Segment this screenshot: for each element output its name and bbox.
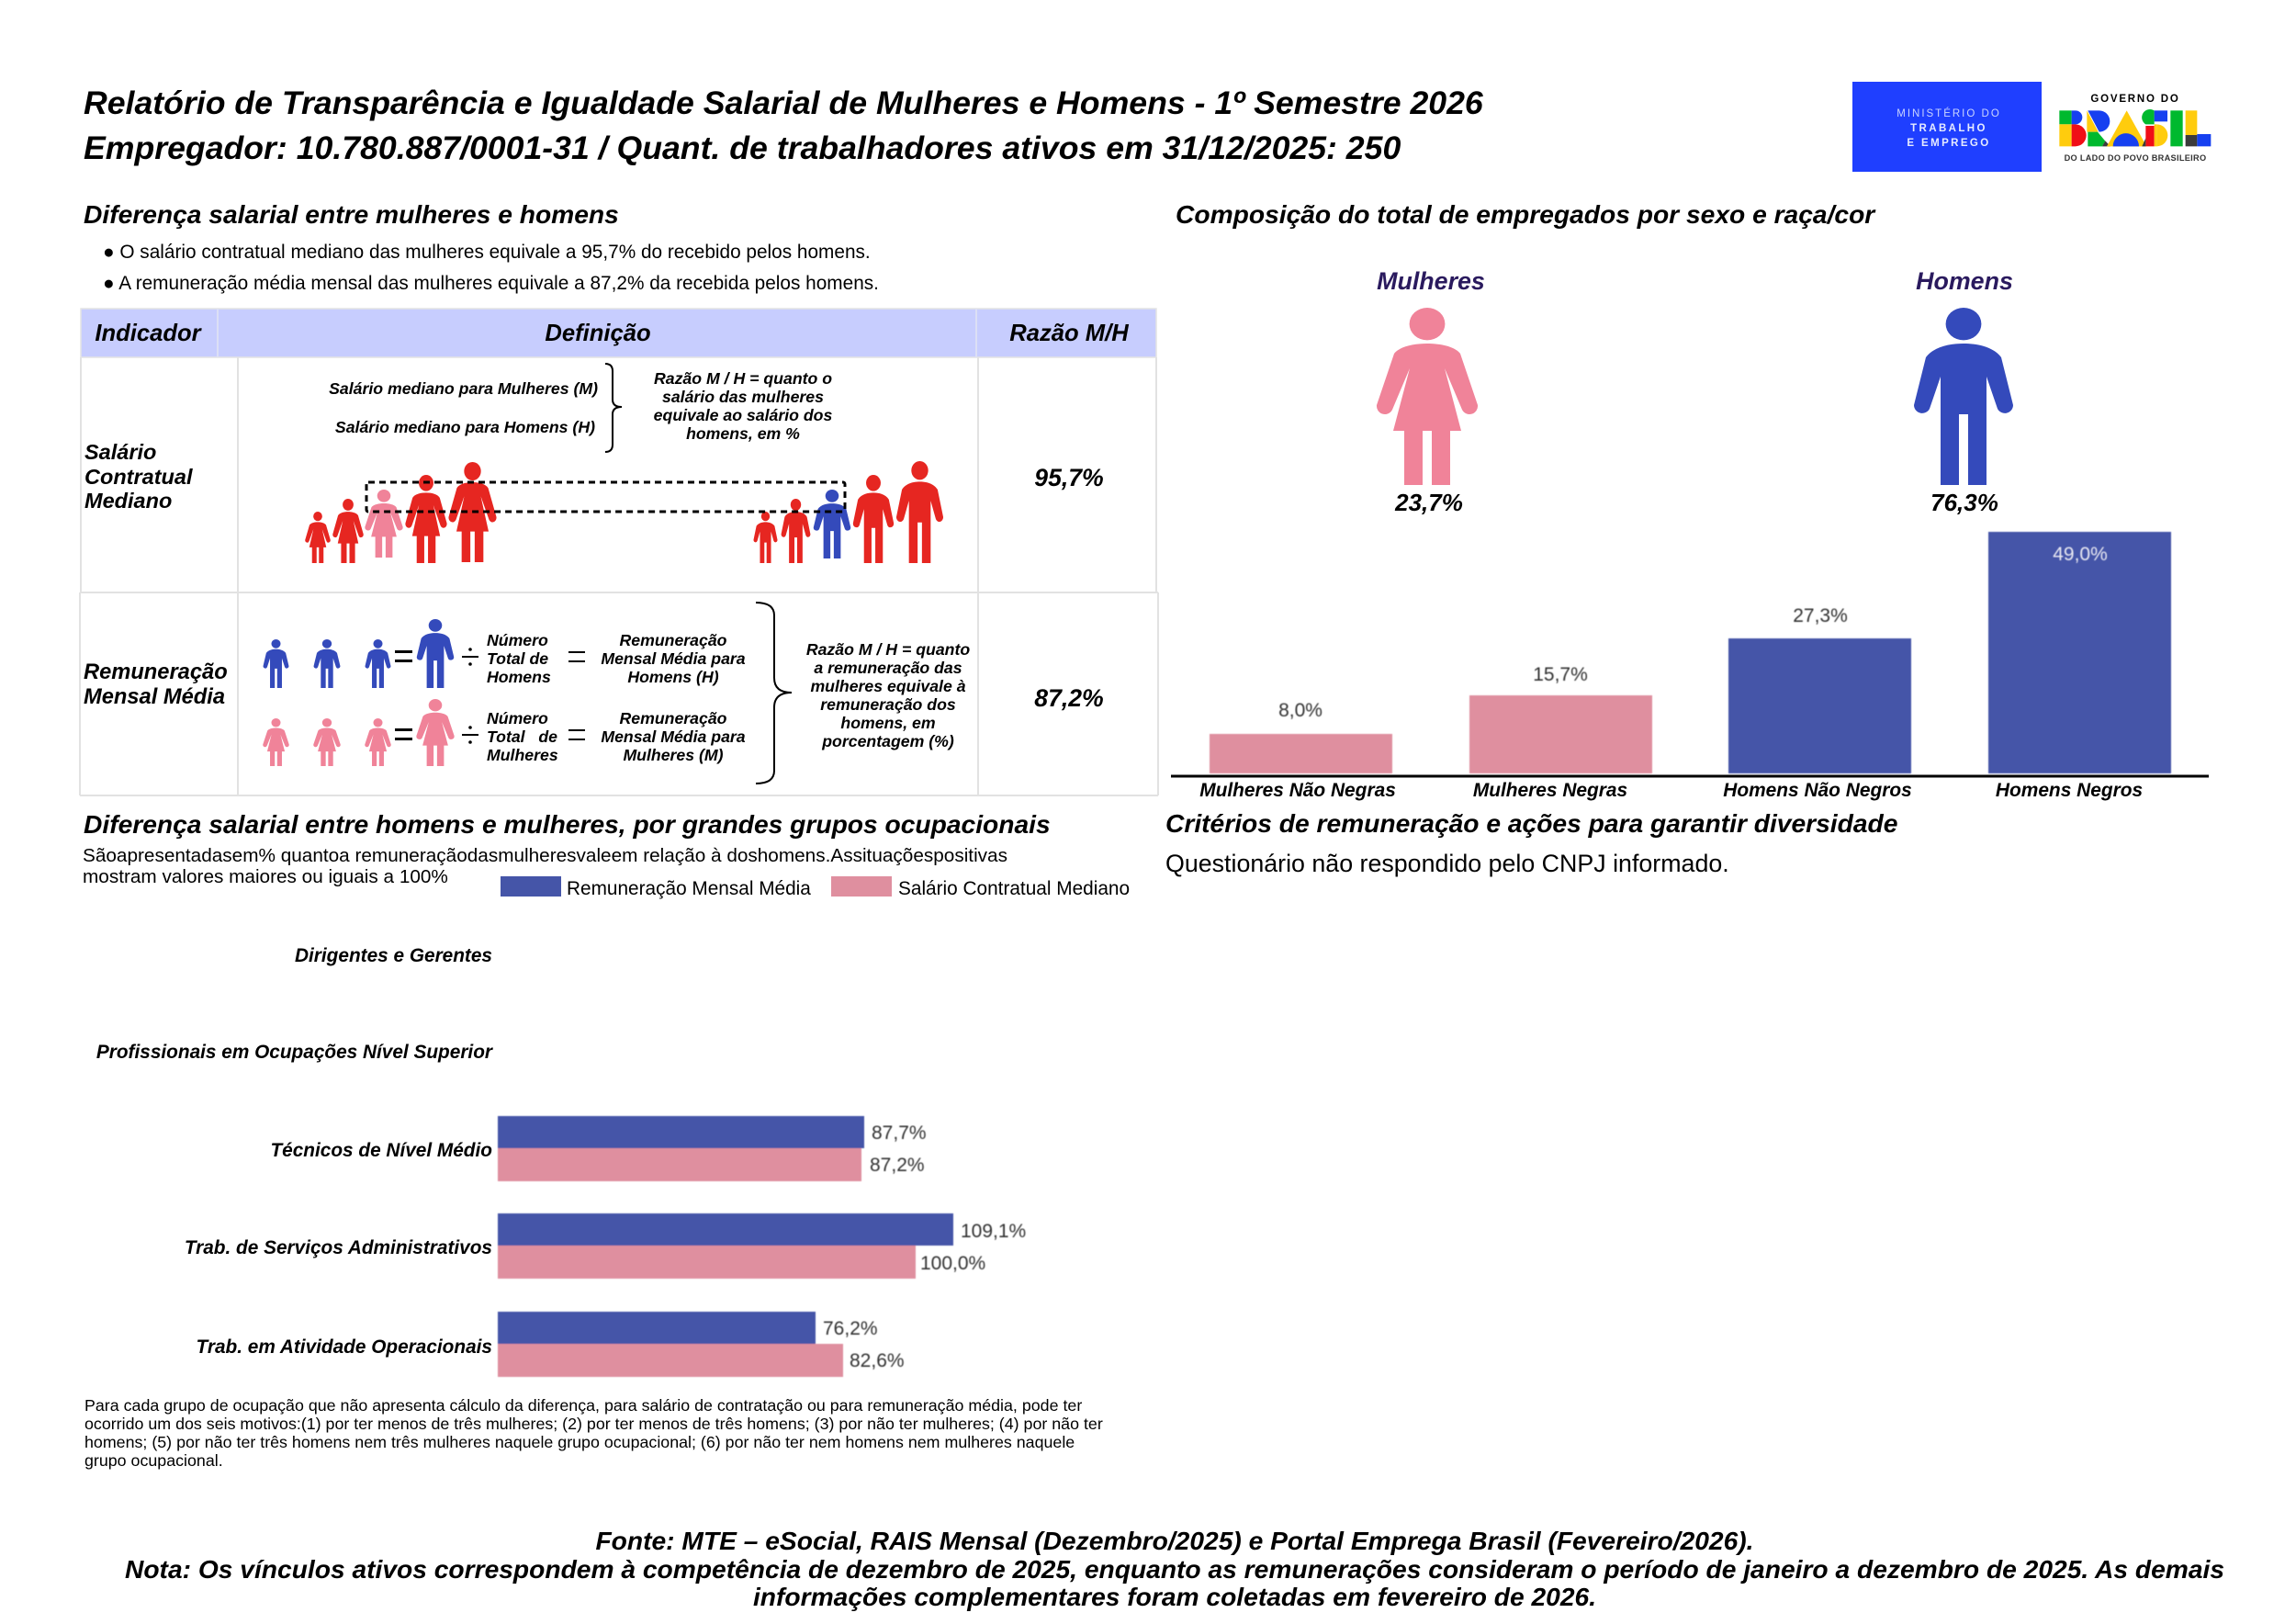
logo: Ministério do Trabalho e Emprego: MINISTÉRIO DO: [1896, 107, 2001, 119]
logo: Governo do Brasil: GOVERNO DO: [2090, 94, 2180, 105]
row: salário contratual mediano: Mediano: [84, 489, 172, 513]
ratio definition: a remuneração das: [814, 659, 962, 677]
median salary labels: Salário mediano para Homens (H): [335, 418, 595, 436]
bar chart: sex and race: 8,0%: [1278, 700, 1322, 721]
logo: Ministério do Trabalho e Emprego: E EMPREGO: [1907, 138, 1991, 149]
description: [83, 845, 1007, 887]
table header: Razão M/H: [1009, 321, 1129, 346]
source note: informações complementares foram coletadas em fevereiro de 2026.: [753, 1582, 1596, 1611]
table: [80, 309, 1158, 795]
title: Empregador: 10.780.887/0001-31 / Quant. de trabalhadores ativos em 31/12/2025: 250: [84, 130, 1401, 166]
footnote: ocorrido um dos seis motivos:(1) por ter menos de três mulheres; (2) por ter menos de três homens; (3) por não ter mulheres; (4) por não ter: [84, 1415, 1103, 1433]
median salary labels: Salário mediano para Mulheres (M): [329, 379, 598, 398]
description: Sãoapresentadasem% quantoa remuneraçãodasmulheresvaleem relação à doshomens.Assituaçõespositivas: [83, 845, 1007, 866]
women share: [1377, 267, 1485, 516]
bullet points: ● A remuneração média mensal das mulheres equivale a 87,2% da recebida pelos homens.: [103, 273, 879, 294]
icons: women formula: [263, 699, 455, 766]
dashed median box: [366, 482, 845, 512]
logo: Ministério do Trabalho e Emprego: [1852, 82, 2042, 172]
horizontal bar chart: [96, 945, 1026, 1377]
men share: Homens: [1916, 267, 2013, 295]
logo: Governo do Brasil: DO LADO DO POVO BRASILEIRO: [2065, 153, 2206, 163]
ratio definition: salário das mulheres: [662, 388, 824, 406]
table grid: [80, 357, 1158, 795]
text: no answer: Questionário não respondido pelo CNPJ informado.: [1165, 850, 1729, 877]
panel: salary difference: [80, 199, 1158, 795]
horizontal bar chart: 82,6%: [850, 1350, 905, 1371]
bar chart: sex and race: Homens Não Negros: [1723, 780, 1912, 801]
footnote: homens; (5) por não ter três homens nem três mulheres naquele grupo ocupacional; (6) por não ter nem homens nem mulheres naquele: [84, 1433, 1075, 1451]
ratio definition: mulheres equivale à: [810, 677, 966, 695]
men equation: Homens (H): [627, 668, 719, 686]
panel: occupational groups: [83, 809, 1130, 1470]
women equation: Mensal Média para: [601, 727, 746, 746]
heading: occupational groups: Diferença salarial entre homens e mulheres, por grandes grupos ocupacionais: [84, 809, 1051, 839]
table header: Indicador: [95, 321, 203, 346]
ratio definition: homens, em %: [686, 424, 800, 443]
bar chart: sex and race: 27,3%: [1793, 605, 1848, 626]
bar chart: sex and race: 15,7%: [1533, 664, 1588, 685]
table header: [81, 309, 1156, 357]
men equation: Total de: [487, 649, 548, 668]
row: remuneração mensal média: Mensal Média: [84, 685, 225, 709]
description: mostram valores maiores ou iguais a 100%: [83, 866, 448, 887]
bar chart: sex and race: Mulheres Negras: [1473, 780, 1627, 801]
row: remuneração mensal média: [84, 603, 1104, 784]
source note: Nota: Os vínculos ativos correspondem à competência de dezembro de 2025, enquanto as remunerações consideram o período de janeiro a dezembro de 2025. As demais: [125, 1554, 2224, 1584]
legend: Salário Contratual Mediano: [898, 878, 1130, 899]
row: salário contratual mediano: Salário: [84, 440, 156, 464]
ratio definition: [654, 369, 832, 443]
brace: [605, 364, 622, 452]
bar chart: sex and race: Mulheres Não Negras: [1199, 780, 1396, 801]
logo: Ministério do Trabalho e Emprego: TRABALHO: [1910, 123, 1987, 134]
horizontal bar chart: 100,0%: [920, 1253, 985, 1274]
bar chart: sex and race: [1171, 532, 2209, 801]
heading: criteria: Critérios de remuneração e ações para garantir diversidade: [1165, 808, 1897, 838]
men equation: [395, 631, 746, 686]
icons: men by salary: [753, 461, 943, 563]
women equation: [395, 709, 746, 764]
women equation: Mulheres (M): [623, 746, 724, 764]
bullet points: [103, 242, 879, 294]
legend: [501, 876, 1130, 899]
title: Relatório de Transparência e Igualdade Salarial de Mulheres e Homens - 1º Semestre 2026: [84, 85, 1484, 121]
median salary labels: [329, 379, 598, 436]
footnote: grupo ocupacional.: [84, 1451, 223, 1470]
panel: workforce composition: [1171, 199, 2209, 801]
title: [84, 85, 1484, 166]
table header: Definição: [545, 321, 651, 346]
women share: 23,7%: [1394, 489, 1463, 516]
ratio definition: equivale ao salário dos: [654, 406, 832, 424]
horizontal bar chart: 87,7%: [872, 1122, 927, 1144]
ratio definition: remuneração dos: [820, 695, 956, 714]
women equation: Número: [487, 709, 548, 727]
men share: [1914, 267, 2013, 516]
bar chart: sex and race: Homens Negros: [1996, 780, 2143, 801]
value: 87,2%: 87,2%: [1034, 684, 1104, 712]
value: 95,7%: 95,7%: [1034, 464, 1104, 491]
horizontal bar chart: Profissionais em Ocupações Nível Superior: [96, 1042, 494, 1063]
footnote: [84, 1396, 1103, 1470]
bar chart: sex and race: 49,0%: [2053, 544, 2108, 565]
heading: composition: Composição do total de empregados por sexo e raça/cor: [1176, 199, 1876, 229]
source note: Fonte: MTE – eSocial, RAIS Mensal (Dezembro/2025) e Portal Emprega Brasil (Fevereiro/2026).: [595, 1526, 1754, 1555]
men share: 76,3%: [1930, 489, 1998, 516]
horizontal bar chart: 109,1%: [961, 1221, 1026, 1242]
legend: Remuneração Mensal Média: [567, 878, 811, 899]
horizontal bar chart: Técnicos de Nível Médio: [270, 1140, 492, 1161]
ratio definition: Razão M / H = quanto o: [654, 369, 832, 388]
women equation: Mulheres: [487, 746, 558, 764]
women equation: Remuneração: [620, 709, 727, 727]
women equation: Total de: [487, 727, 557, 746]
ratio definition: porcentagem (%): [821, 732, 954, 750]
ratio definition: Razão M / H = quanto: [806, 640, 970, 659]
horizontal bar chart: 87,2%: [870, 1155, 925, 1176]
bullet points: ● O salário contratual mediano das mulheres equivale a 95,7% do recebido pelos homens.: [103, 242, 871, 263]
source note: [125, 1526, 2224, 1611]
heading: salary difference: Diferença salarial entre mulheres e homens: [84, 199, 619, 229]
men equation: Remuneração: [620, 631, 727, 649]
horizontal bar chart: 76,2%: [823, 1318, 878, 1339]
icons: women by salary: [305, 462, 497, 563]
men equation: Mensal Média para: [601, 649, 746, 668]
brace: [756, 603, 792, 784]
row: remuneração mensal média: Remuneração: [84, 660, 228, 684]
panel: remuneration criteria: [1165, 808, 1897, 877]
ratio definition: homens, em: [840, 714, 936, 732]
logo: Governo do Brasil: [2059, 94, 2211, 163]
footnote: Para cada grupo de ocupação que não apresenta cálculo da diferença, para salário de contratação ou para remuneração média, pode ter: [84, 1396, 1082, 1415]
horizontal bar chart: Dirigentes e Gerentes: [295, 945, 492, 966]
row: salário contratual mediano: [84, 364, 1104, 563]
women share: Mulheres: [1377, 267, 1485, 295]
men equation: Homens: [487, 668, 551, 686]
icons: men formula: [264, 619, 454, 688]
ratio definition: [806, 640, 970, 750]
row: salário contratual mediano: Contratual: [84, 465, 193, 489]
men equation: Número: [487, 631, 548, 649]
horizontal bar chart: Trab. em Atividade Operacionais: [197, 1336, 492, 1358]
horizontal bar chart: Trab. de Serviços Administrativos: [185, 1237, 492, 1258]
